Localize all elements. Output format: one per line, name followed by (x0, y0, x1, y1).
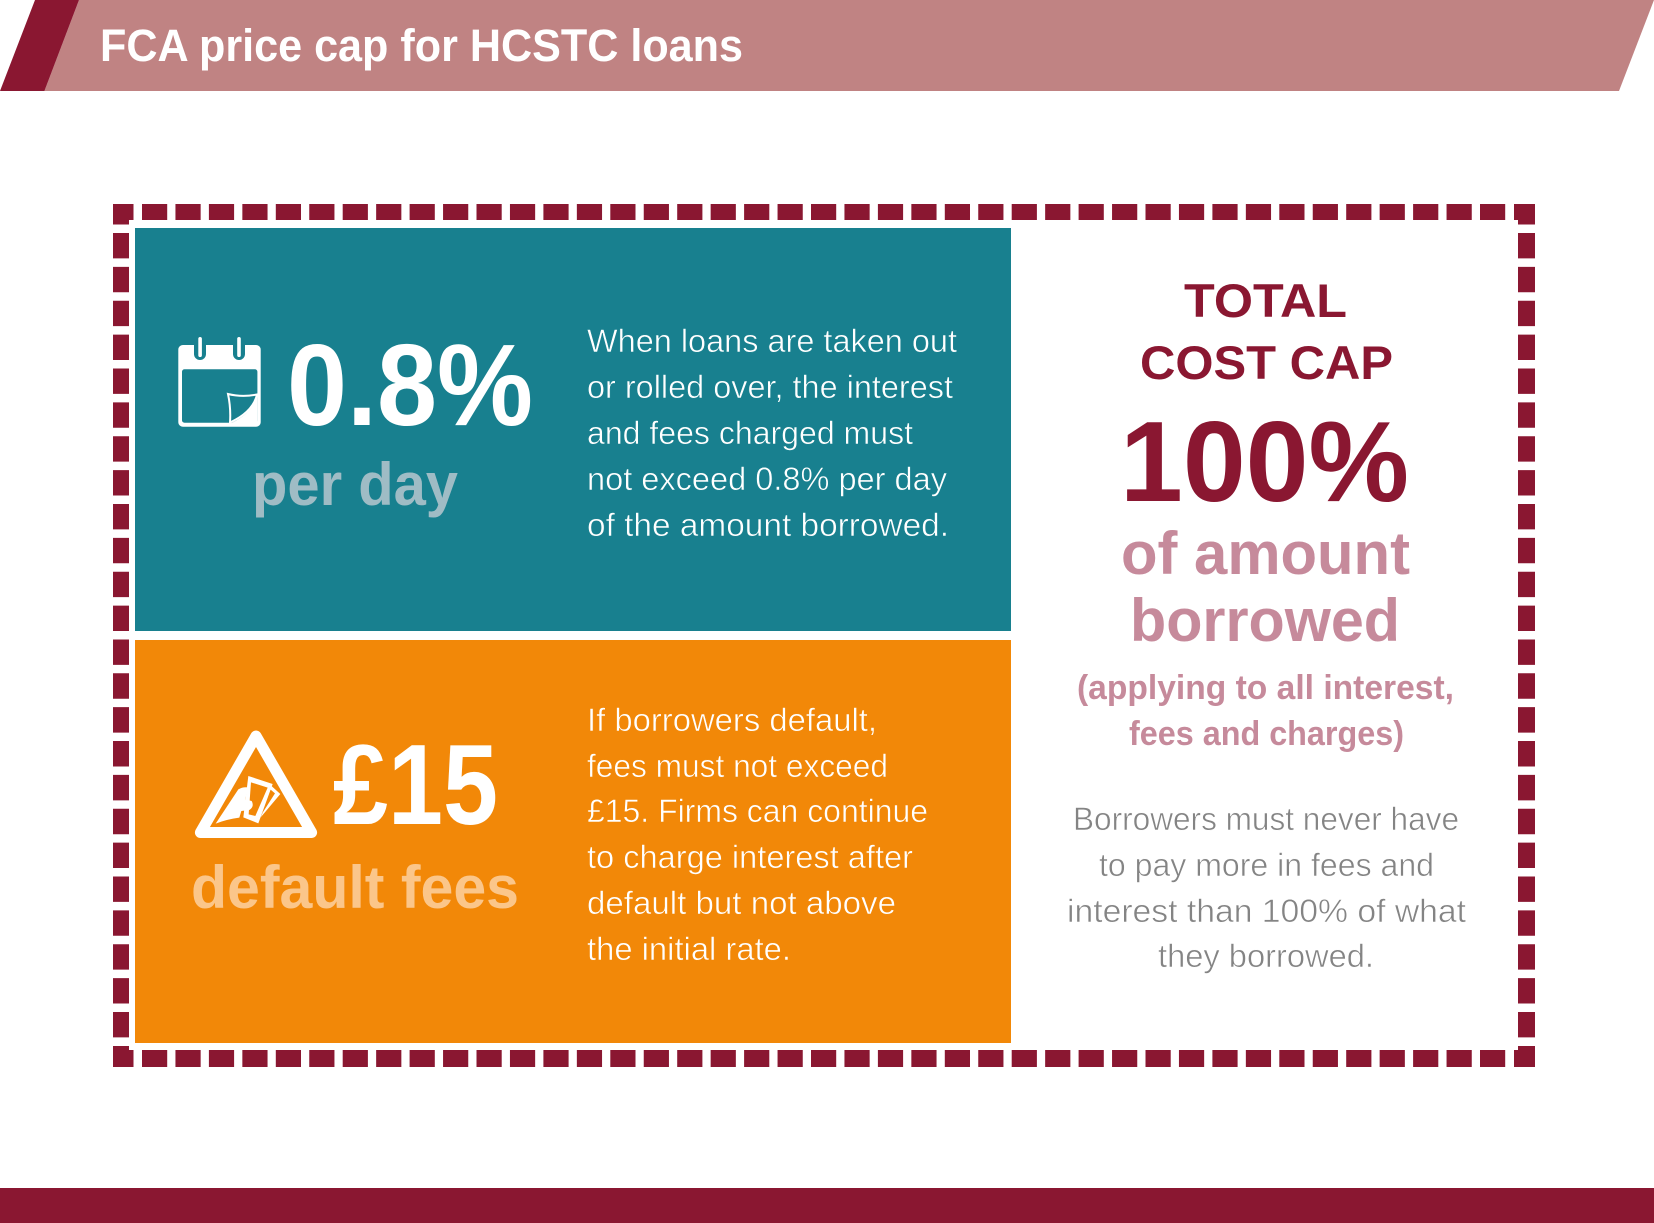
text: daily cap description: not exceed 0.8% per day (587, 461, 947, 497)
dashed border frame (113, 204, 1535, 1067)
label: of amount borrowed: of amount (1121, 520, 1410, 587)
panel: £15 default fees (135, 640, 1011, 1043)
text: daily cap description: or rolled over, the interest (587, 369, 953, 405)
text: total cap description: they borrowed. (1158, 938, 1374, 974)
panel: total cost cap (1067, 274, 1466, 974)
text: daily cap description: of the amount borrowed. (587, 507, 949, 543)
note: applying to all interest, fees and charges: fees and charges) (1129, 715, 1404, 753)
text: default fee description: default but not above (587, 885, 896, 921)
text: default fee description: If borrowers default, (587, 702, 877, 738)
text: default fee description (587, 702, 928, 967)
text: total cap description: interest than 100% of what (1067, 893, 1466, 929)
figure: £15: £15 (333, 722, 498, 849)
title: FCA price cap for HCSTC loans (100, 20, 743, 71)
heading: total cost cap (1140, 274, 1393, 389)
text: default fee description: the initial rate. (587, 931, 791, 967)
icon: calendar (178, 337, 261, 427)
text: total cap description (1067, 801, 1466, 974)
text: total cap description: Borrowers must never have (1073, 801, 1459, 837)
note: applying to all interest, fees and charges: (applying to all interest, (1077, 669, 1454, 707)
heading: total cost cap: TOTAL (1184, 274, 1347, 327)
label: of amount borrowed: borrowed (1130, 587, 1400, 654)
heading: total cost cap: COST CAP (1140, 336, 1393, 389)
text: total cap description: to pay more in fees and (1099, 847, 1434, 883)
label: of amount borrowed (1121, 520, 1410, 654)
icon: warning triangle with banknotes (200, 736, 312, 832)
figure: 0.8%: 0.8% (287, 320, 533, 450)
text: default fee description: £15. Firms can continue (587, 793, 928, 829)
text: daily cap description (587, 323, 957, 543)
label: per day: per day (252, 451, 459, 518)
footer bar (0, 1188, 1654, 1223)
panel: 0.8% per day (135, 228, 1011, 631)
text: daily cap description: and fees charged must (587, 415, 913, 451)
note: applying to all interest, fees and charges (1077, 669, 1454, 753)
text: default fee description: fees must not exceed (587, 748, 888, 784)
header banner (0, 0, 1654, 91)
text: daily cap description: When loans are taken out (587, 323, 957, 359)
text: default fee description: to charge interest after (587, 839, 913, 875)
figure: 100%: 100% (1120, 399, 1409, 526)
label: default fees: default fees (191, 854, 519, 921)
